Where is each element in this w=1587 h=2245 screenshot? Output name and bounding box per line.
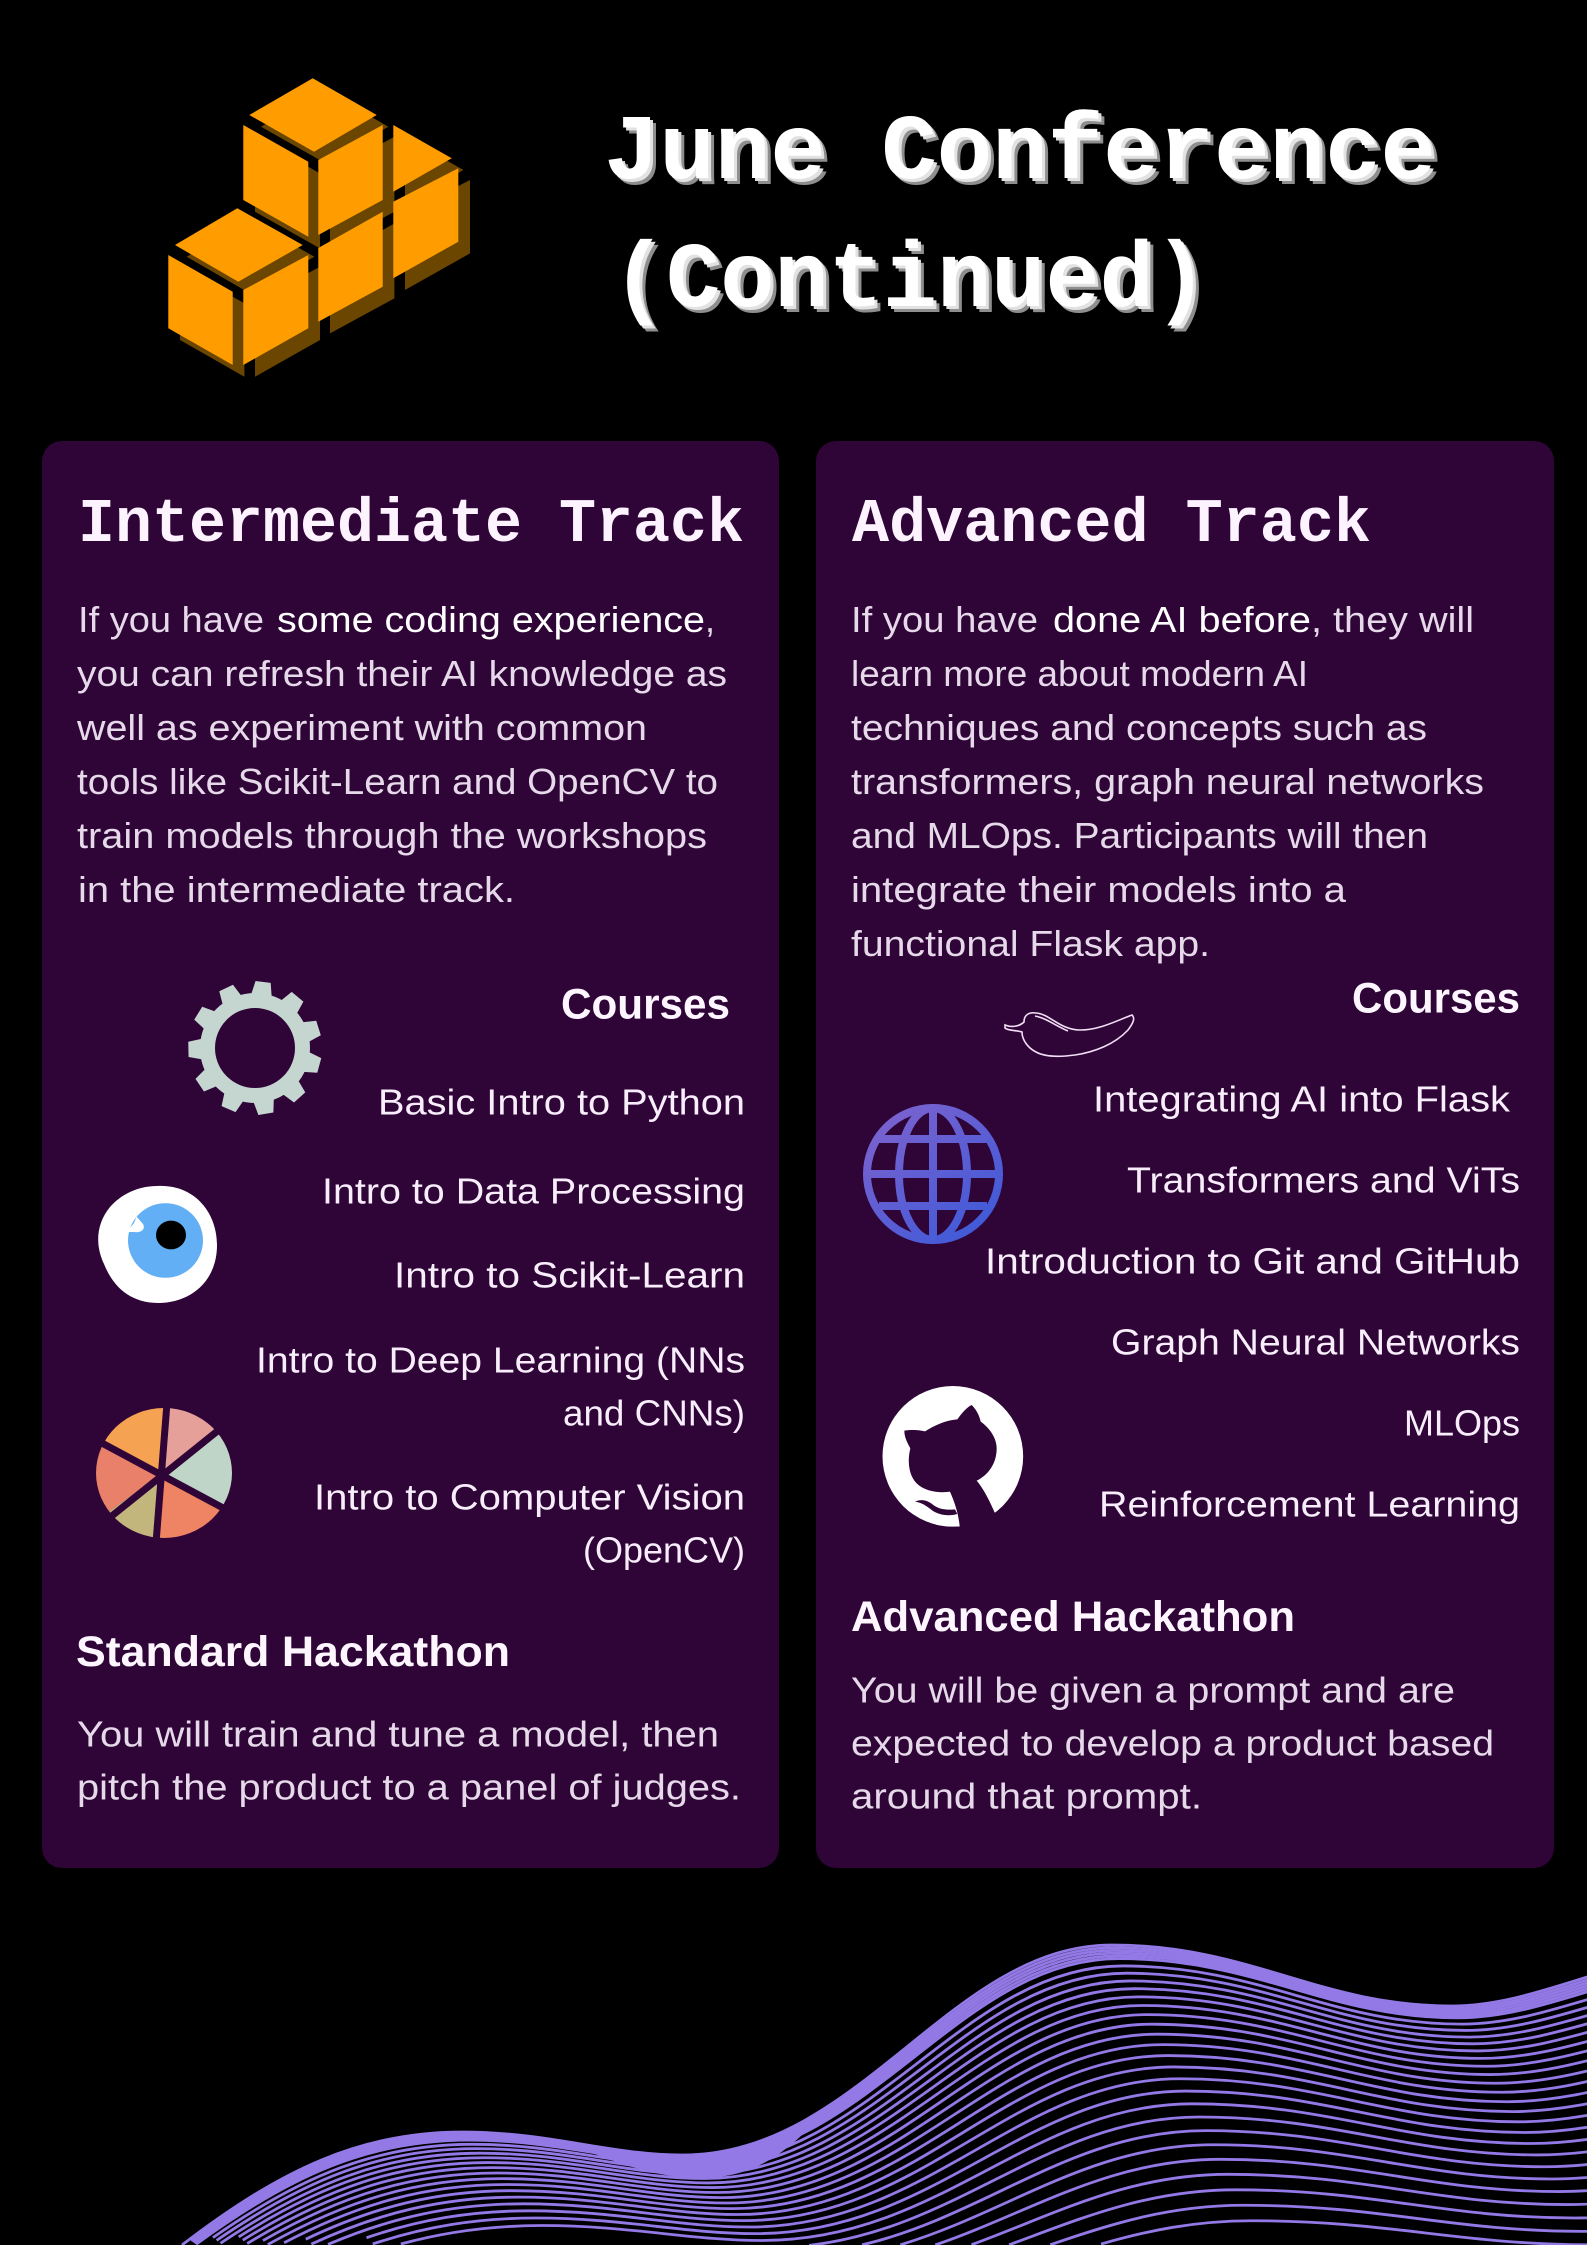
- courses list: advanced: MLOps: [1404, 1402, 1520, 1444]
- text block: intermediate description: in the intermediate track.: [78, 869, 515, 910]
- courses list: intermediate: (OpenCV): [583, 1530, 745, 1570]
- courses list: intermediate: Courses: [561, 980, 730, 1028]
- text block: advanced description: If you have: [851, 599, 1038, 640]
- text block: intermediate description: some coding experience: [277, 599, 705, 640]
- icon: eye: [98, 1186, 217, 1303]
- text block: advanced description: functional Flask app.: [851, 923, 1210, 964]
- courses list: advanced: Transformers and ViTs: [1127, 1160, 1520, 1200]
- courses list: intermediate: Basic Intro to Python: [378, 1082, 745, 1122]
- heading: standard hackathon: Standard Hackathon: [76, 1628, 510, 1676]
- text block: advanced description: [851, 599, 1484, 964]
- panel: advanced track: [816, 441, 1554, 1868]
- courses list: advanced: Introduction to Git and GitHub: [985, 1240, 1520, 1282]
- icon: github logo: [882, 1386, 1023, 1530]
- icon: globe: [867, 1108, 999, 1240]
- text block: advanced description: , they will: [1311, 599, 1474, 640]
- heading: advanced track: Advanced Track: [852, 489, 1371, 560]
- text block: intermediate description: [76, 599, 727, 910]
- text block: advanced description: and MLOps. Participants will then: [851, 815, 1428, 856]
- courses list: intermediate: [256, 980, 745, 1570]
- courses list: intermediate: Intro to Data Processing: [322, 1170, 745, 1212]
- courses list: advanced: Reinforcement Learning: [1099, 1484, 1520, 1524]
- wave: purple line pattern: [181, 1944, 1587, 2245]
- title: (Continued): [612, 229, 1208, 334]
- courses list: intermediate: Intro to Computer Vision: [314, 1476, 745, 1518]
- heading: advanced hackathon: Advanced Hackathon: [851, 1593, 1295, 1641]
- courses list: intermediate: Intro to Deep Learning (NNs: [256, 1340, 745, 1380]
- text block: standard hackathon description: [77, 1714, 741, 1808]
- text block: standard hackathon description: You will train and tune a model, then: [77, 1714, 719, 1754]
- text block: advanced description: techniques and concepts such as: [851, 707, 1427, 748]
- text block: advanced hackathon description: You will be given a prompt and are: [851, 1670, 1455, 1710]
- text block: intermediate description: tools like Scikit-Learn and OpenCV to: [77, 761, 718, 802]
- text block: advanced description: integrate their models into a: [851, 869, 1347, 910]
- text block: advanced hackathon description: expected to develop a product based: [851, 1722, 1494, 1764]
- logo: stacked orange cubes: [168, 78, 470, 377]
- heading: intermediate track: Intermediate Track: [78, 489, 744, 560]
- text block: intermediate description: If you have: [78, 599, 264, 640]
- courses list: advanced: [985, 974, 1520, 1524]
- courses list: advanced: Graph Neural Networks: [1111, 1322, 1520, 1362]
- text block: standard hackathon description: pitch the product to a panel of judges.: [77, 1766, 741, 1808]
- panel: intermediate track: [42, 441, 779, 1868]
- title: June Conference: [604, 101, 1436, 206]
- text block: advanced description: learn more about modern AI: [851, 653, 1308, 694]
- text block: intermediate description: well as experiment with common: [76, 707, 647, 748]
- courses list: intermediate: and CNNs): [563, 1392, 745, 1434]
- title: [604, 101, 1436, 334]
- icon: pie chart: [96, 1408, 232, 1538]
- icon: gear: [188, 981, 322, 1115]
- courses list: advanced: Integrating AI into Flask: [1093, 1078, 1511, 1120]
- text block: advanced hackathon description: around that prompt.: [851, 1776, 1202, 1816]
- text block: advanced hackathon description: [851, 1670, 1494, 1816]
- text block: intermediate description: train models through the workshops: [77, 815, 707, 856]
- courses list: intermediate: Intro to Scikit-Learn: [394, 1254, 745, 1296]
- text block: advanced description: done AI before: [1053, 599, 1311, 640]
- text block: advanced description: transformers, graph neural networks: [851, 761, 1484, 802]
- text block: intermediate description: you can refresh their AI knowledge as: [77, 653, 727, 694]
- text block: intermediate description: ,: [705, 599, 715, 640]
- courses list: advanced: Courses: [1352, 974, 1520, 1022]
- icon: chili pepper: [1005, 1013, 1134, 1056]
